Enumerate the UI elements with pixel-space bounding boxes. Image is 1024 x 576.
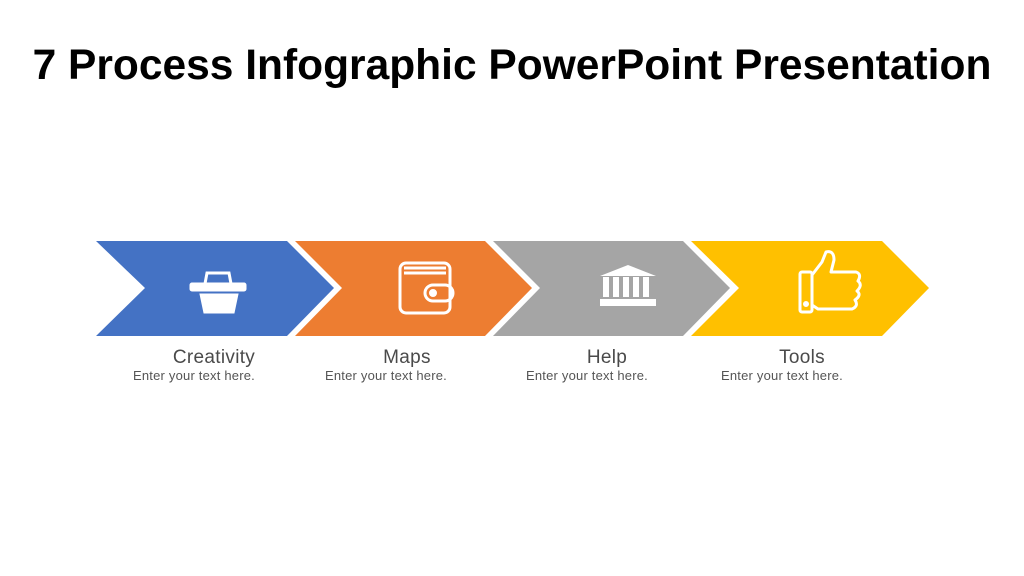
title: 7 Process Infographic PowerPoint Presentation bbox=[33, 42, 991, 89]
label: Help: Help bbox=[587, 347, 627, 368]
text: Creativity desc: Enter your text here. bbox=[133, 368, 255, 383]
icon: thumbs up bbox=[800, 252, 860, 312]
label: Tools: Tools bbox=[779, 347, 825, 368]
text: Tools desc: Enter your text here. bbox=[721, 368, 843, 383]
chevron: yellow bbox=[691, 241, 929, 336]
text: Help desc: Enter your text here. bbox=[526, 368, 648, 383]
icon: basket bbox=[190, 273, 246, 313]
chevron: orange bbox=[295, 241, 532, 336]
label: Creativity: Creativity bbox=[173, 347, 255, 368]
icon: wallet bbox=[400, 263, 453, 313]
icon: bank bbox=[600, 265, 656, 306]
text: Maps desc: Enter your text here. bbox=[325, 368, 447, 383]
label: Maps: Maps bbox=[383, 347, 431, 368]
chevron: gray bbox=[493, 241, 730, 336]
chevron: blue bbox=[96, 241, 334, 336]
